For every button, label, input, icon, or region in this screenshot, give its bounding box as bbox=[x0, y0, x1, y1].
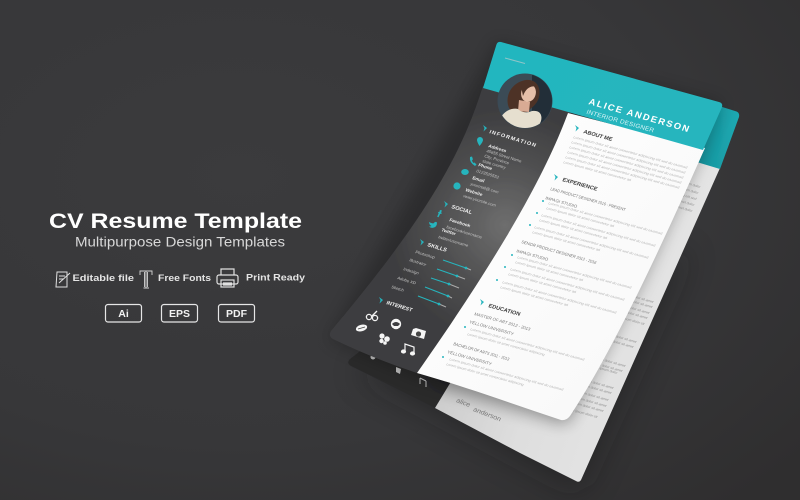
job 2 bullets bbox=[496, 254, 632, 315]
arrow bbox=[379, 297, 383, 304]
sidebar panel bbox=[330, 86, 570, 373]
job 1 bullets: Lorem ipsum dolor sit amet consectetur ad bbox=[546, 206, 615, 228]
address: City, Province bbox=[484, 153, 511, 166]
arrow bbox=[575, 125, 579, 132]
address bbox=[482, 143, 523, 170]
bullet 1: Lorem ipsum dolor sit amet consectetur adipiscing bbox=[467, 332, 545, 357]
facebook: facebook/username bbox=[446, 224, 484, 240]
white content panel bbox=[417, 113, 705, 420]
back sheet: text fragments: lorem ipsum dolor sit bbox=[612, 313, 645, 326]
job 1 bullets: Lorem ipsum dolor sit amet consectetur ad bbox=[539, 218, 608, 240]
twitter: Twitter bbox=[441, 227, 457, 236]
back sheet: text fragments: sit amet dolor bbox=[673, 198, 696, 207]
face bbox=[521, 86, 536, 102]
degree 2: BACHELOR OF ARTS 2011 - 2013 bbox=[453, 341, 511, 362]
phone bbox=[476, 162, 501, 180]
icon: twitter bbox=[429, 222, 437, 228]
icon: butterfly bbox=[379, 333, 390, 345]
back sheet: text fragments bbox=[562, 177, 702, 419]
heading: INFORMATION bbox=[488, 129, 537, 149]
paragraph: Lorem ipsum dolor sit amet consectetur adipiscing elit sed do eiusmod bbox=[573, 135, 688, 170]
back sheet: teal header bbox=[690, 100, 739, 169]
school 1: YELLOW UNIVERSITY bbox=[469, 319, 515, 336]
icon: phone bbox=[470, 156, 476, 166]
shadow beneath sheets bbox=[355, 250, 690, 492]
job 1 bullets: Lorem ipsum dolor sit amet consectetur adipiscing elit sed do eiusmod bbox=[541, 213, 656, 248]
website bbox=[463, 187, 498, 208]
arrow bbox=[483, 125, 487, 132]
job 1 title: LEAD PRODUCT DESIGNER 2016 - PRESENT bbox=[550, 186, 627, 212]
feature: free fonts bbox=[140, 271, 211, 288]
icon: printer bbox=[217, 269, 238, 287]
icon: music bbox=[402, 344, 414, 355]
back sheet: dark sidebar bbox=[348, 320, 452, 408]
icon: facebook bbox=[437, 210, 442, 217]
skill labels: Sketch bbox=[391, 284, 406, 293]
skill labels: Adobe XD bbox=[397, 275, 417, 285]
icon: bike bbox=[366, 311, 378, 321]
heading: EXPERIENCE bbox=[561, 177, 599, 193]
skill labels: Illustrator bbox=[409, 257, 428, 267]
job 2 bullets: Lorem ipsum dolor sit amet consectetur ad bbox=[500, 285, 569, 307]
bullet 2: Lorem ipsum dolor sit amet consectetur adipiscing bbox=[446, 362, 524, 387]
section: skills bbox=[391, 239, 471, 307]
section: about me bbox=[563, 125, 688, 190]
icon: edit document bbox=[56, 272, 70, 287]
paragraph: Lorem ipsum dolor sit amet consectetur adipiscing elit sed do eiusmod bbox=[569, 145, 684, 180]
email bbox=[470, 175, 500, 195]
bullet 1: Lorem ipsum dolor sit amet consectetur adipiscing elit sed do eiusmod bbox=[470, 327, 585, 362]
section: social bbox=[429, 201, 484, 248]
icon: website bbox=[453, 182, 461, 190]
back sheet: text fragments: lorem ipsum dolor sit amet bbox=[606, 305, 648, 320]
back sheet: text fragments: lorem ipsum dolor sit amet bbox=[608, 300, 650, 315]
icon: camera bbox=[411, 328, 426, 339]
back sheet: text fragments: lorem ipsum dolor sit amet bbox=[572, 375, 614, 390]
school 2: YELLOW UNIVERSITY bbox=[447, 349, 493, 366]
back sheet: text fragments: lorem ipsum dolor sit amet bbox=[562, 398, 604, 413]
icon: leaf bbox=[355, 323, 368, 333]
back sheet: signatures: anderson bbox=[472, 406, 502, 423]
bullet 2: Lorem ipsum dolor sit amet consectetur adipiscing elit sed do eiusmod bbox=[449, 357, 564, 392]
icon: letter T bbox=[140, 271, 152, 288]
header hairline bbox=[505, 58, 525, 64]
paragraph: Lorem ipsum dolor sit amet consectetur ad bbox=[563, 160, 632, 182]
front sheet bbox=[330, 42, 722, 420]
section: information bbox=[453, 125, 537, 208]
paragraph bbox=[563, 135, 688, 190]
neck bbox=[518, 100, 530, 112]
job 2 bullets: Lorem ipsum dolor sit amet consectetur ad bbox=[508, 272, 577, 294]
email: yourmail@.com bbox=[470, 181, 500, 195]
job 1 bullets: Lorem ipsum dolor sit amet consectetur adipiscing elit sed do eiusmod bbox=[534, 225, 649, 260]
job 1 bullets: Lorem ipsum dolor sit amet consectetur ad bbox=[532, 230, 601, 252]
back sheet: text fragments: lorem ipsum dolor sit amet bbox=[592, 334, 634, 349]
job 2 bullets: Lorem ipsum dolor sit amet consectetur adipiscing elit sed do eiusmod bbox=[510, 267, 625, 302]
job 1 bullets: Lorem ipsum dolor sit amet consectetur adipiscing elit sed do eiusmod bbox=[548, 201, 663, 236]
back sheet: text fragments: lorem ipsum dolor sit amet bbox=[581, 358, 623, 373]
job 1 bullets bbox=[529, 200, 663, 260]
address: Address bbox=[488, 143, 508, 153]
degree 1: MASTER OF ART 2012 - 2013 bbox=[474, 311, 532, 332]
back sheet: text fragments: sit amet ipsum dolor bbox=[669, 177, 702, 189]
paragraph: Lorem ipsum dolor sit amet consectetur adipiscing elit sed do eiusmod bbox=[571, 140, 686, 175]
back sheet: signatures bbox=[455, 397, 502, 423]
back sheet: text fragments: lorem ipsum dolor sit amet bbox=[565, 393, 607, 408]
phone: Phone bbox=[478, 162, 494, 171]
name: ALICE ANDERSON bbox=[587, 97, 691, 134]
back sheet: text fragments: adipiscing elit sed bbox=[668, 190, 697, 201]
back sheet: text fragments: lorem ipsum dolor bbox=[589, 364, 619, 375]
badge: EPS: EPS bbox=[169, 308, 190, 320]
skill labels: Indesign bbox=[403, 266, 421, 276]
heading: ABOUT ME bbox=[582, 129, 614, 143]
heading: SOCIAL bbox=[450, 204, 474, 216]
heading: EDUCATION bbox=[487, 303, 521, 318]
job 2 bullets: Lorem ipsum dolor sit amet consectetur ad bbox=[515, 260, 584, 282]
heading: INTEREST bbox=[385, 300, 414, 314]
email: Email bbox=[472, 175, 485, 183]
icon: email bbox=[461, 169, 469, 175]
paragraph: Lorem ipsum dolor sit amet consectetur adipiscing elit sed do eiusmod bbox=[567, 150, 682, 185]
back sheet: grey page bbox=[435, 160, 720, 482]
skill bars bbox=[418, 260, 471, 307]
address: 45655 Street Name bbox=[486, 148, 523, 164]
label: editable file: Editable file bbox=[72, 273, 134, 284]
feature: print ready bbox=[217, 269, 306, 287]
section: experience bbox=[496, 174, 663, 315]
facebook bbox=[446, 217, 484, 240]
teal header bbox=[483, 42, 722, 150]
section: education bbox=[442, 299, 585, 392]
back sheet: text fragments: lorem ipsum dolor sit amet bbox=[584, 353, 626, 368]
twitter: twitter/username bbox=[438, 234, 470, 248]
paragraph: Lorem ipsum dolor sit amet consectetur adipiscing elit sed do eiusmod bbox=[565, 155, 680, 190]
fringe bbox=[522, 84, 534, 96]
feature: editable file bbox=[56, 272, 134, 287]
badge: Ai: Ai bbox=[118, 308, 129, 320]
back sheet: shadow of front page bbox=[443, 135, 710, 428]
arrow bbox=[420, 239, 424, 246]
label: print ready: Print Ready bbox=[246, 272, 306, 284]
front sheet shadow bbox=[328, 42, 722, 422]
back sheet: text fragments: lorem ipsum dolor sit amet bbox=[611, 294, 653, 309]
back sheet: signatures: alice bbox=[455, 397, 471, 409]
back sheet: text fragments: lorem ipsum dolor sit bbox=[565, 406, 598, 419]
facebook: Facebook bbox=[449, 217, 472, 228]
arrow bbox=[480, 299, 484, 306]
back sheet: text fragments: lorem ipsum dolor sit amet bbox=[567, 387, 609, 402]
blouse bbox=[502, 108, 542, 128]
profile photo bbox=[498, 74, 552, 128]
badge: PDF: PDF bbox=[226, 308, 248, 320]
title: CV Resume Template bbox=[49, 209, 302, 233]
website: www.yoursite.com bbox=[463, 193, 498, 208]
back sheet: text fragments: lorem ipsum dolor sit amet bbox=[612, 289, 654, 304]
badge: EPS bbox=[162, 304, 198, 322]
label: free fonts: Free Fonts bbox=[158, 273, 211, 284]
back sheet: text fragments: sit amet ipsum dolor bbox=[667, 183, 700, 195]
job title: INTERIOR DESIGNER bbox=[585, 109, 655, 134]
back sheet: faint icons bbox=[370, 354, 426, 387]
section: interest bbox=[355, 297, 426, 355]
badge: Ai bbox=[106, 304, 142, 322]
skill labels bbox=[391, 249, 437, 293]
hair bbox=[508, 80, 540, 114]
arrow bbox=[444, 201, 448, 208]
back sheet: text fragments: lorem ipsum dolor sit amet bbox=[595, 329, 637, 344]
job 2 title: SENIOR PRODUCT DESIGNER 2012 - 2016 bbox=[521, 239, 598, 265]
back sheet bbox=[348, 100, 739, 482]
skill labels: Photoshop bbox=[415, 249, 437, 260]
badge: PDF bbox=[218, 304, 254, 322]
address: state country bbox=[482, 158, 508, 170]
website: Website bbox=[465, 187, 484, 197]
job 2 bullets: Lorem ipsum dolor sit amet consectetur adipiscing elit sed do eiusmod bbox=[502, 280, 617, 315]
back sheet: text fragments: lorem ipsum dolor sit amet bbox=[570, 380, 612, 395]
back sheet: text fragments: sit amet dolor bbox=[671, 204, 694, 213]
icon: pin bbox=[477, 137, 483, 146]
arrow bbox=[554, 174, 558, 180]
phone: 0123525552 bbox=[476, 168, 501, 180]
job 2 bullets: Lorem ipsum dolor sit amet consectetur adipiscing elit sed do eiusmod bbox=[517, 255, 632, 290]
job 2 company: IMPAGI STUDIO bbox=[516, 248, 550, 262]
subtitle: Multipurpose Design Templates bbox=[75, 234, 285, 250]
twitter bbox=[438, 227, 470, 248]
heading: SKILLS bbox=[426, 242, 448, 254]
job 1 company: IMPAGI STUDIO bbox=[545, 195, 579, 209]
icon: globe bbox=[391, 319, 401, 329]
